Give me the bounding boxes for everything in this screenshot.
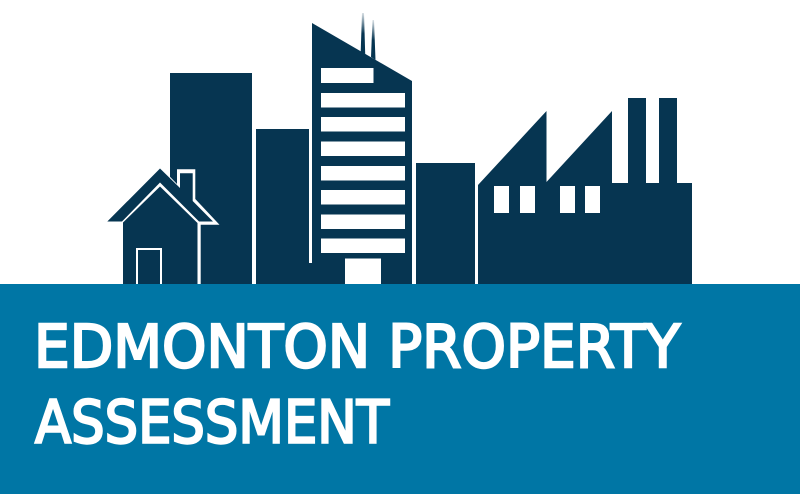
- house door: [137, 249, 161, 285]
- tower body: [312, 23, 412, 284]
- tower with slanted roof: [312, 13, 412, 284]
- house body: [123, 186, 198, 284]
- tower windows: [321, 68, 405, 253]
- title text: [34, 312, 681, 456]
- title line 1: EDMONTON PROPERTY: [34, 312, 681, 381]
- factory silhouette: [478, 98, 692, 284]
- building: right of tower: [416, 163, 475, 284]
- skyline illustration: [106, 13, 692, 285]
- title band: [0, 284, 800, 494]
- factory: [478, 98, 692, 284]
- gap between middle block and tower: [309, 129, 312, 263]
- building: middle block: [256, 129, 312, 284]
- icon: tower antennas: [361, 13, 376, 60]
- house: [106, 166, 220, 285]
- house white halo: [106, 166, 220, 284]
- title line 2: ASSESSMENT: [35, 388, 390, 456]
- house roof: [107, 168, 213, 222]
- building: tall left block: [170, 73, 252, 284]
- tower door: [345, 258, 381, 284]
- factory windows: [494, 186, 600, 213]
